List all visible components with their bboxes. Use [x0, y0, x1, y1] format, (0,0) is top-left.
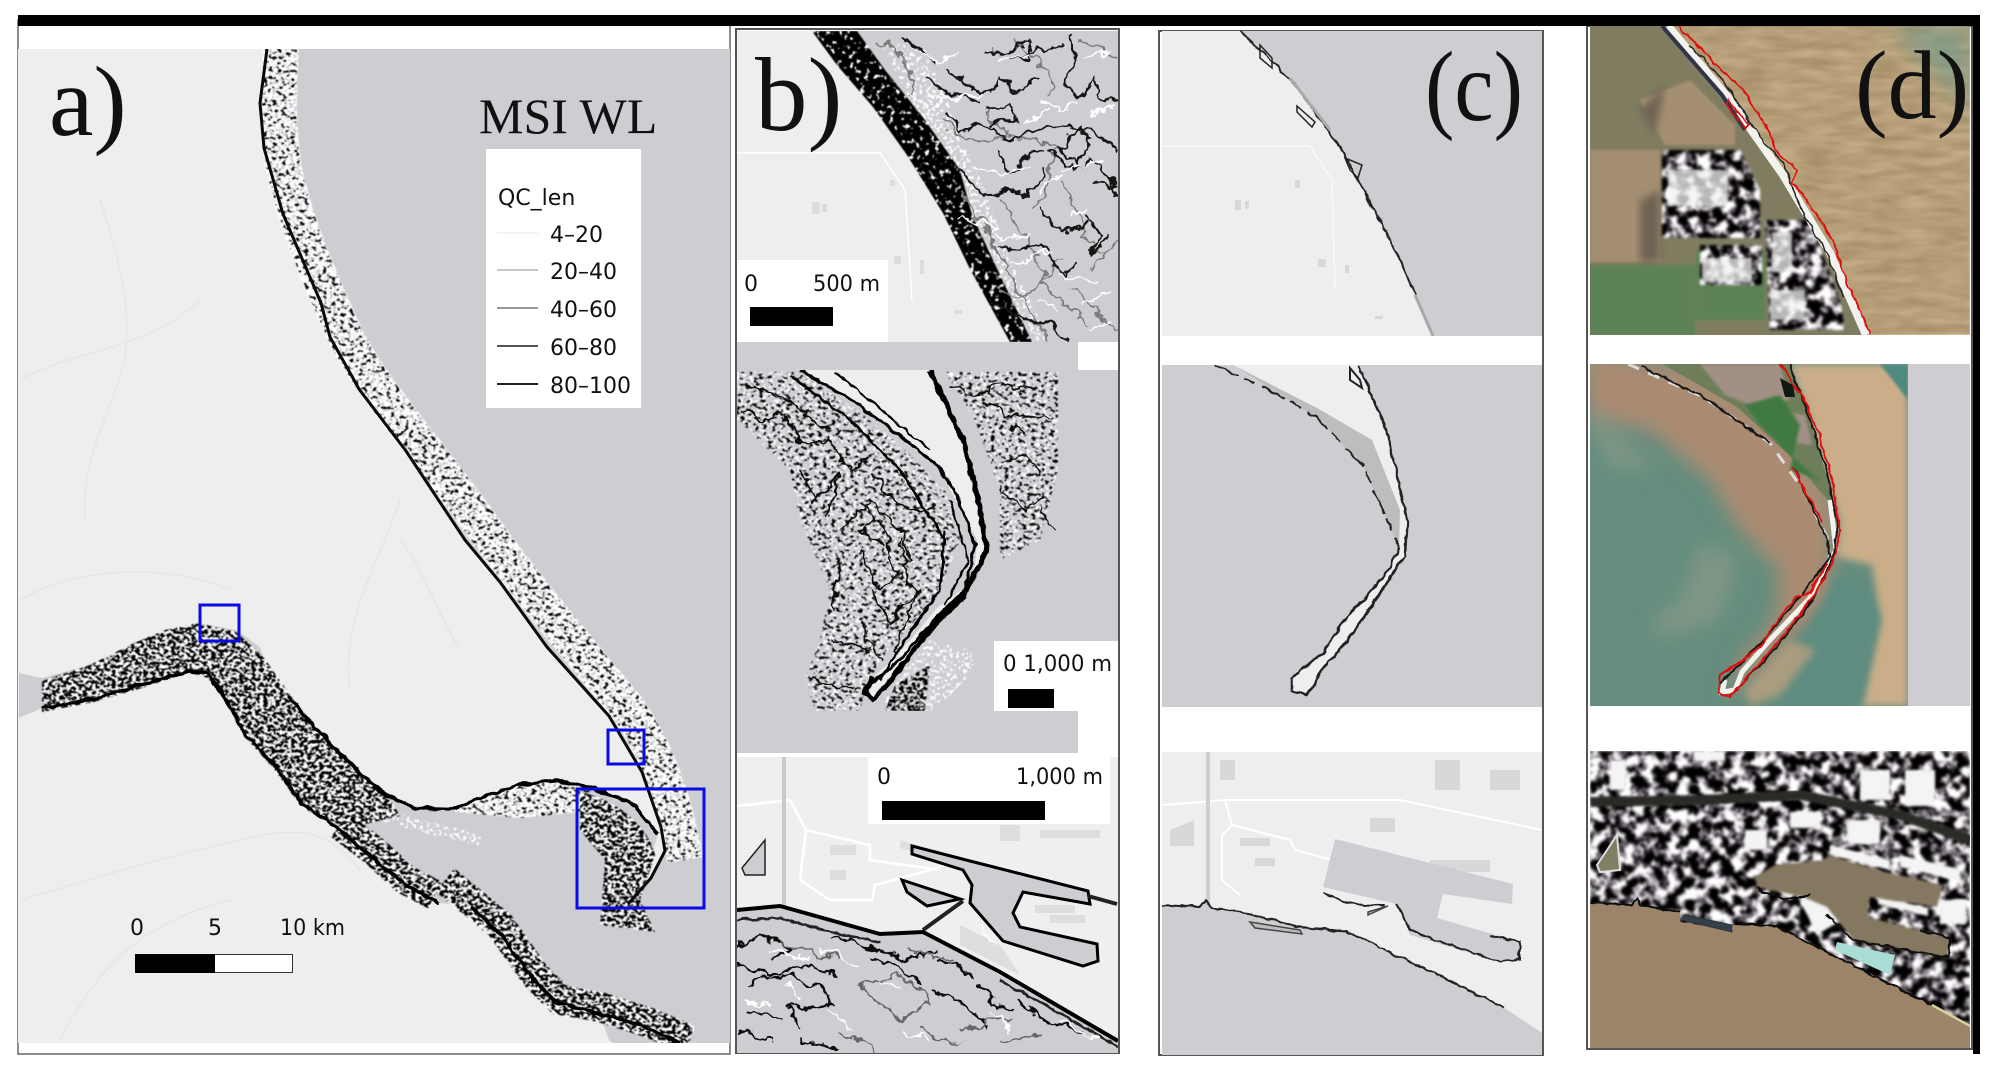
beach d1	[1668, 26, 1866, 335]
river speckle white	[42, 623, 400, 830]
bay speckle black	[580, 792, 655, 932]
bank lines a	[42, 671, 680, 1043]
legend	[486, 149, 641, 408]
legend 60-80: 60–80	[550, 336, 617, 361]
label b): b)	[755, 36, 842, 153]
sub-map c2	[1162, 365, 1542, 707]
small loops c1	[1260, 45, 1362, 178]
sea tan d2	[1790, 364, 1908, 706]
land b2	[798, 370, 987, 699]
south bank speckle black	[340, 825, 690, 1040]
roads c3	[1162, 800, 1542, 895]
blue box 3	[577, 789, 704, 908]
pond b3	[742, 840, 765, 875]
inner shore c2	[1215, 365, 1399, 548]
white speckle by shore b1	[880, 40, 1050, 342]
bay plume lower d2	[1580, 400, 1740, 640]
right black bar	[1973, 15, 1980, 1054]
water a	[19, 49, 730, 1043]
south bank speckle white	[340, 825, 690, 1040]
contours gray b1	[880, 40, 1118, 340]
sea speckle white	[279, 49, 685, 860]
sub-map c3	[1162, 752, 1542, 1055]
legend 4-20	[497, 223, 603, 248]
urban patches d1	[1662, 150, 1845, 330]
shore lines b3	[737, 906, 1118, 1041]
scale legend b3: 0	[877, 765, 891, 790]
pond d3	[1597, 835, 1620, 872]
water c3	[1162, 901, 1542, 1055]
contours black b1	[905, 35, 1118, 342]
shoreline c1	[1240, 31, 1415, 295]
sub-map b2	[737, 370, 1118, 711]
river speckle black	[42, 623, 400, 830]
sub-map c1	[1162, 31, 1542, 336]
legend 40-60	[497, 298, 617, 323]
shore lines b2	[790, 370, 987, 699]
red outline d2	[1718, 364, 1840, 697]
basin b3	[912, 846, 1098, 966]
gray shore c1	[1290, 78, 1433, 336]
frame a	[18, 20, 730, 1054]
coast line a	[260, 49, 665, 904]
bay dark strokes b2	[742, 385, 935, 690]
scale bar a	[130, 916, 345, 973]
land d1	[1590, 26, 1867, 335]
top black bar	[18, 15, 1980, 26]
black outline d2	[1640, 364, 1838, 697]
shore light d3	[1932, 1005, 1972, 1027]
sand plume d2	[1745, 640, 1815, 706]
sea speckle black	[279, 49, 685, 860]
roads b3	[737, 800, 945, 900]
land c1	[1162, 31, 1433, 336]
panel a: overview map	[18, 20, 730, 1054]
east contours b2	[950, 380, 1055, 530]
legend 80-100	[497, 374, 631, 399]
green d2	[1745, 395, 1820, 480]
legend 20-40: 20–40	[550, 260, 617, 285]
red line d1	[1677, 25, 1870, 333]
black shore band b1	[812, 31, 1032, 342]
sub-image d3	[1590, 751, 1972, 1048]
gray strip c2	[1233, 365, 1400, 548]
land a	[18, 49, 730, 1043]
outline c2	[1292, 365, 1407, 695]
bay d2	[1590, 364, 1908, 706]
frame c	[1159, 31, 1543, 1055]
dark shadow d1	[1640, 85, 1665, 262]
teal building d3	[1835, 942, 1895, 975]
small pier c3	[1250, 906, 1388, 934]
frame b	[736, 29, 1119, 1053]
label a): a)	[49, 46, 127, 157]
small pond c2	[1350, 368, 1362, 388]
pier b3	[923, 896, 1117, 930]
scale legend b2	[994, 641, 1118, 711]
buildings c3	[1170, 760, 1520, 872]
shore d3	[1590, 887, 1950, 1005]
basin d3	[1755, 855, 1950, 958]
brown bay plume d2	[1580, 350, 1835, 700]
sub-image d2	[1580, 350, 1908, 706]
urban d3	[1590, 751, 1970, 1048]
buildings b3	[830, 825, 1100, 975]
basin c3	[1323, 839, 1520, 962]
legend 80-100: 80–100	[550, 374, 631, 399]
shore line c3	[1162, 901, 1503, 1007]
buildings c1	[1235, 180, 1383, 319]
scale legend b1: 0	[744, 272, 758, 297]
south speckle b2	[880, 640, 975, 711]
teal top right d1	[1890, 26, 1970, 110]
light estuary speckle	[375, 812, 480, 840]
gray band 1	[737, 342, 1078, 370]
shore second line b3	[737, 918, 1118, 1046]
water b3	[737, 906, 1118, 1053]
scale legend b3	[868, 753, 1110, 824]
east speckle b2	[945, 372, 1058, 560]
scale legend b1: 500 m	[813, 272, 880, 297]
scale bar a: 10 km	[280, 916, 345, 941]
dark shore d1	[1662, 26, 1745, 130]
east black speckle b2	[945, 372, 1058, 560]
panel d: satellite overlays	[1580, 25, 1972, 1049]
sub-map b1	[737, 31, 1118, 342]
green fields d1	[1590, 250, 1765, 335]
canal c3	[1206, 752, 1210, 902]
estuary lens speckle white	[455, 780, 590, 818]
canal b3	[782, 757, 786, 907]
bay speckle b2	[737, 372, 960, 711]
scale legend b1	[737, 260, 888, 342]
field brown d1	[1590, 80, 1735, 262]
scale bar a: 0	[130, 916, 144, 941]
land tracks	[20, 200, 460, 1040]
small bay b3	[902, 880, 960, 906]
scale legend b2: 0 1,000 m	[1003, 652, 1112, 677]
contours b3	[737, 935, 1080, 1050]
sub-map b3	[737, 753, 1118, 1053]
white buildings d3	[1610, 751, 1966, 934]
black line d1	[1690, 45, 1843, 297]
frame d	[1587, 26, 1972, 1049]
basin line c3	[1325, 893, 1520, 962]
contours white b3	[745, 925, 1100, 1040]
label (c): (c)	[1425, 31, 1523, 142]
fields d2	[1700, 364, 1812, 445]
contours gray b3	[780, 945, 1040, 1050]
land c2	[1233, 365, 1407, 695]
buildings b1	[812, 180, 962, 314]
road b1	[737, 153, 912, 300]
scale bar a: 5	[208, 916, 222, 941]
map a	[18, 49, 730, 1043]
panel c: reference shoreline	[1159, 31, 1543, 1055]
bay black speckle b2	[737, 372, 960, 711]
legend 4-20: 4–20	[550, 223, 603, 248]
scale legend b3: 1,000 m	[1016, 765, 1103, 790]
south black speckle b2	[885, 665, 930, 711]
gray band 2	[737, 711, 1078, 753]
dark pond d2	[1780, 378, 1795, 397]
dark road d3	[1590, 795, 1970, 840]
white buildings d1	[1668, 170, 1805, 320]
inner beach d2	[1628, 364, 1830, 557]
sea d1	[1590, 26, 1970, 335]
title MSI WL: MSI WL	[479, 88, 657, 144]
land d2	[1663, 364, 1835, 510]
sub-image d1	[1590, 25, 1970, 335]
label (d): (d)	[1855, 32, 1969, 140]
land b1	[737, 31, 1010, 342]
gray strip d2	[1908, 364, 1970, 706]
teal corner d2	[1880, 364, 1908, 400]
legend title: QC_len	[498, 186, 575, 211]
bay speckle white	[580, 792, 655, 932]
spit white d2	[1722, 500, 1836, 692]
water d3	[1590, 898, 1972, 1048]
legend 20-40	[497, 260, 617, 285]
pier d3	[1682, 915, 1732, 932]
estuary lens speckle black	[455, 780, 590, 818]
panel b: water line detail	[736, 29, 1119, 1053]
legend 40-60: 40–60	[550, 298, 617, 323]
teal lower d2	[1765, 575, 1880, 706]
blue box 2	[608, 730, 644, 764]
contours white b1	[905, 50, 1118, 330]
legend 60-80	[497, 336, 617, 361]
blue box 1	[200, 605, 239, 641]
